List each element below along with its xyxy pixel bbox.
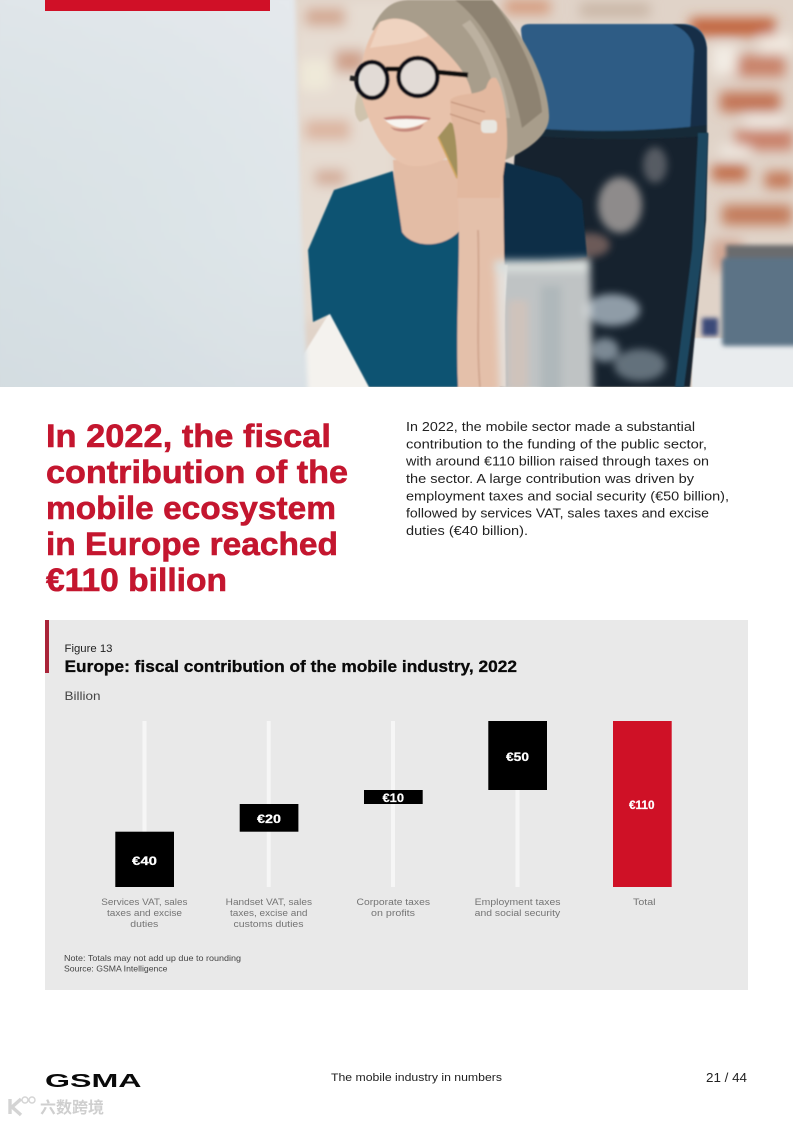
- desk surfaces: [304, 314, 793, 387]
- category labels: duties: [130, 919, 159, 930]
- chart title: Europe: fiscal contribution of the mobile industry, 2022: [64, 657, 517, 676]
- unit label: Billion: [64, 689, 100, 703]
- bar: employment taxes €50: [488, 721, 547, 790]
- panel accent bar: [45, 620, 49, 673]
- bar: corporate taxes €10: [364, 790, 423, 805]
- glass on desk: [494, 258, 593, 395]
- bar: handset VAT €20: [240, 804, 298, 832]
- category labels: Corporate taxes: [356, 897, 430, 908]
- monitor foreground: [0, 0, 308, 392]
- footer title: The mobile industry in numbers: [331, 1072, 503, 1084]
- bar: total €110: [613, 721, 672, 887]
- body paragraph: contribution to the funding of the public sector,: [406, 436, 707, 451]
- body paragraph: with around €110 billion raised through taxes on: [405, 454, 709, 469]
- figure label: Figure 13: [64, 643, 112, 655]
- watermark: [10, 1097, 104, 1117]
- body paragraph: duties (€40 billion).: [406, 523, 528, 538]
- phone: [438, 122, 458, 177]
- note and source: [64, 953, 241, 974]
- body paragraph: followed by services VAT, sales taxes and excise: [406, 506, 709, 521]
- heading: In 2022, the fiscal: [46, 418, 331, 454]
- face: [361, 18, 472, 166]
- body paragraph: employment taxes and social security (€50 billion),: [406, 488, 729, 503]
- note and source: Source: GSMA Intelligence: [64, 964, 168, 974]
- woman: [308, 0, 587, 387]
- hand: [450, 78, 507, 198]
- mouth: [383, 117, 431, 128]
- category labels: on profits: [371, 908, 415, 919]
- GSMA logo: GSMA: [45, 1071, 142, 1091]
- bar: services VAT €40: [115, 832, 174, 887]
- hero photo: woman on phone at desk: [0, 0, 793, 395]
- bar: employment taxes €50: €50: [506, 750, 529, 764]
- page number: 21 / 44: [706, 1071, 747, 1085]
- category labels: and social security: [475, 908, 560, 919]
- body paragraph: the sector. A large contribution was driven by: [406, 471, 695, 486]
- category labels: taxes and excise: [107, 908, 182, 919]
- category labels: customs duties: [234, 919, 304, 930]
- heading: in Europe reached: [46, 526, 338, 562]
- body paragraph: [405, 419, 729, 538]
- category labels: taxes, excise and: [230, 908, 308, 919]
- printer: [702, 245, 793, 346]
- heading: contribution of the: [46, 454, 348, 490]
- chest and neck: [392, 160, 506, 246]
- heading: [46, 418, 348, 598]
- glasses: [356, 58, 438, 98]
- dress: [308, 171, 463, 387]
- back hair: [372, 0, 549, 160]
- bar: handset VAT €20: €20: [257, 812, 281, 826]
- category labels: Handset VAT, sales: [226, 897, 312, 908]
- waterfall bar chart: [115, 721, 672, 887]
- category labels: Services VAT, sales: [101, 897, 188, 908]
- category labels: [101, 897, 656, 930]
- panel: figure 13: [45, 620, 748, 990]
- heading: €110 billion: [46, 562, 227, 598]
- footer: [45, 1071, 747, 1091]
- bar: corporate taxes €10: €10: [382, 791, 404, 805]
- office chair: [500, 24, 708, 387]
- heading: mobile ecosystem: [46, 490, 336, 526]
- category labels: Total: [633, 897, 656, 908]
- bar: total €110: €110: [629, 798, 655, 812]
- note and source: Note: Totals may not add up due to rounding: [64, 953, 241, 963]
- body paragraph: In 2022, the mobile sector made a substantial: [406, 419, 695, 434]
- bar: services VAT €40: €40: [132, 854, 157, 868]
- red tab: [45, 0, 270, 11]
- category labels: Employment taxes: [475, 897, 561, 908]
- forearm: [457, 161, 506, 387]
- watermark: 六数跨境: [40, 1098, 104, 1117]
